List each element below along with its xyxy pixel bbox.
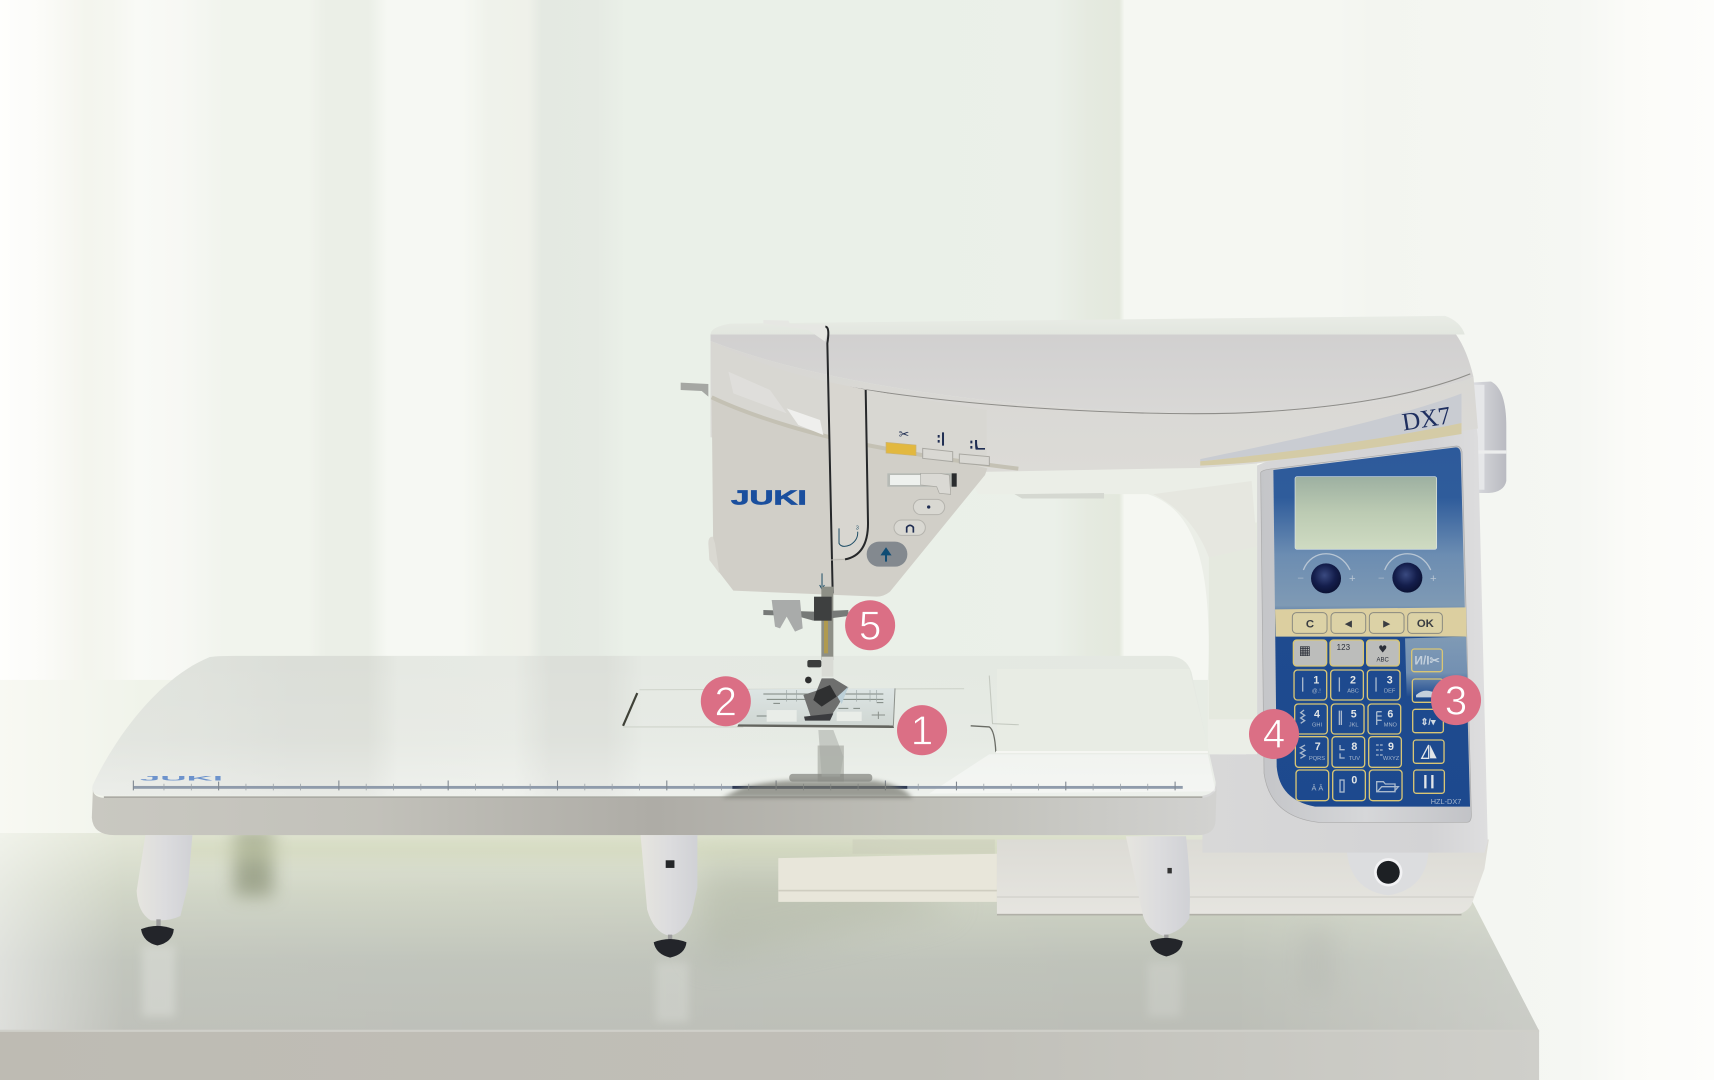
keypad stitch icons — [1300, 677, 1398, 792]
yellow control band — [1275, 607, 1467, 637]
keypad letter labels: JKL — [1349, 723, 1359, 729]
column — [1202, 377, 1488, 853]
marker 1 — [897, 705, 947, 755]
marker 2 — [701, 676, 751, 726]
machine head — [681, 320, 1018, 597]
desk top surface — [0, 833, 1539, 1031]
surface reflections — [929, 669, 1216, 794]
dial left — [1297, 554, 1356, 593]
socket — [1347, 852, 1429, 895]
middle leg — [641, 835, 697, 958]
arm front — [711, 341, 1478, 472]
presser foot — [803, 678, 848, 719]
desk front edge — [0, 1031, 1539, 1080]
needle bar — [821, 587, 833, 660]
needle plate — [737, 688, 896, 728]
dial right: − — [1378, 573, 1385, 585]
marker 4: 4 — [1263, 711, 1285, 757]
control panel: ▦ — [1299, 643, 1311, 658]
round buttons — [867, 499, 945, 567]
top thread guide — [763, 320, 829, 342]
shadows under the extension table — [142, 831, 1334, 1022]
keypad letter labels: ABC — [1347, 689, 1359, 695]
keypad digits: 8 — [1351, 741, 1357, 753]
marker 5: 5 — [859, 602, 881, 648]
marker 4 — [1249, 709, 1299, 759]
keypad digits: 7 — [1315, 741, 1321, 753]
keypad digits: 9 — [1388, 741, 1394, 753]
machine head: 3 — [856, 525, 859, 531]
keypad digits: 1 — [1313, 674, 1319, 686]
table front face — [92, 785, 1217, 835]
hand wheel — [1470, 381, 1506, 493]
keypad digits: 4 — [1314, 708, 1320, 720]
swoosh band — [712, 397, 1018, 469]
highlight on head — [728, 372, 787, 413]
control panel: 123 — [1337, 643, 1351, 652]
spool tab — [681, 383, 708, 397]
sewing machine — [681, 316, 1506, 915]
side function keys — [1412, 649, 1444, 793]
thread path icon — [839, 528, 858, 546]
marker 1: 1 — [911, 707, 933, 753]
keypad digits — [1313, 674, 1394, 786]
panel blue face — [1273, 447, 1470, 807]
dial right: + — [1430, 573, 1437, 585]
control panel: OK — [1417, 618, 1435, 630]
keypad letter labels: DEF — [1384, 689, 1396, 695]
keypad letter labels — [1309, 689, 1400, 793]
accessory slide under table — [778, 840, 997, 902]
table top surface — [92, 656, 1216, 796]
keypad digits: 5 — [1351, 708, 1357, 720]
speed slider — [887, 473, 957, 494]
control panel: И/I✂ — [1414, 653, 1440, 667]
machine base — [997, 840, 1489, 915]
foot holder — [763, 610, 848, 621]
button icons: ✂ — [899, 427, 909, 442]
keypad letter labels: GHI — [1312, 723, 1322, 729]
left leg — [137, 835, 192, 946]
table legs — [137, 835, 1190, 958]
control panel: ABC — [1377, 657, 1390, 663]
button icons — [899, 427, 985, 450]
control panel: ♥ — [1378, 645, 1387, 656]
marker 3: 3 — [1445, 677, 1467, 723]
head lower tab — [708, 537, 719, 573]
keypad letter labels: PQRS — [1309, 756, 1325, 762]
keypad letter labels: TUV — [1349, 756, 1360, 762]
silver wedge behind DX7 — [1200, 394, 1461, 461]
extension table — [92, 656, 1217, 958]
LCD display — [1295, 477, 1437, 549]
marker 3 — [1431, 675, 1481, 725]
keypad digits: 0 — [1351, 774, 1357, 786]
navigation buttons — [1292, 613, 1442, 633]
mode keys — [1293, 640, 1399, 666]
keypad letter labels: Ā Ā — [1311, 784, 1323, 793]
keypad letter labels: WXYZ — [1383, 756, 1400, 762]
free-arm cut-out lines — [623, 676, 1208, 752]
neck — [962, 463, 1257, 754]
dial right — [1378, 554, 1437, 593]
arm lid — [711, 334, 1474, 413]
control panel: ▶ — [1383, 619, 1391, 630]
DX7 label: DX7 — [1400, 402, 1453, 437]
desk — [0, 831, 1539, 1080]
needle and presser foot — [737, 587, 896, 777]
dial left: − — [1297, 573, 1304, 585]
plate reflection — [818, 730, 843, 777]
machine reflection — [721, 746, 913, 798]
gold stripe — [1200, 423, 1461, 466]
panel silver frame — [1261, 446, 1471, 822]
table JUKI logo: JUKI — [140, 775, 224, 783]
right leg — [1126, 836, 1190, 956]
dial left: + — [1349, 573, 1356, 585]
take-up slot — [845, 390, 868, 559]
control panel: ◀ — [1345, 619, 1353, 630]
marker 5 — [845, 600, 895, 650]
lid top clear strip — [711, 316, 1465, 334]
number keypad — [1294, 670, 1402, 801]
thread slot — [825, 327, 833, 593]
keypad digits: 6 — [1387, 708, 1393, 720]
control panel: C — [1306, 618, 1314, 630]
marker 2: 2 — [715, 678, 737, 724]
keypad letter labels: MNO — [1384, 723, 1398, 729]
JUKI logo: JUKI — [731, 487, 807, 509]
stitch buttons — [886, 442, 989, 466]
needle down icon — [820, 573, 824, 589]
keypad letter labels: @.! — [1312, 689, 1321, 695]
keypad digits: 3 — [1387, 674, 1393, 686]
model label: HZL-DX7 — [1431, 797, 1461, 806]
keypad digits: 2 — [1350, 674, 1356, 686]
ruler — [133, 780, 1183, 790]
head face — [712, 397, 987, 597]
upper head panel — [712, 342, 987, 463]
control panel — [1261, 446, 1471, 822]
control panel: ⇕/▾ — [1420, 717, 1436, 727]
